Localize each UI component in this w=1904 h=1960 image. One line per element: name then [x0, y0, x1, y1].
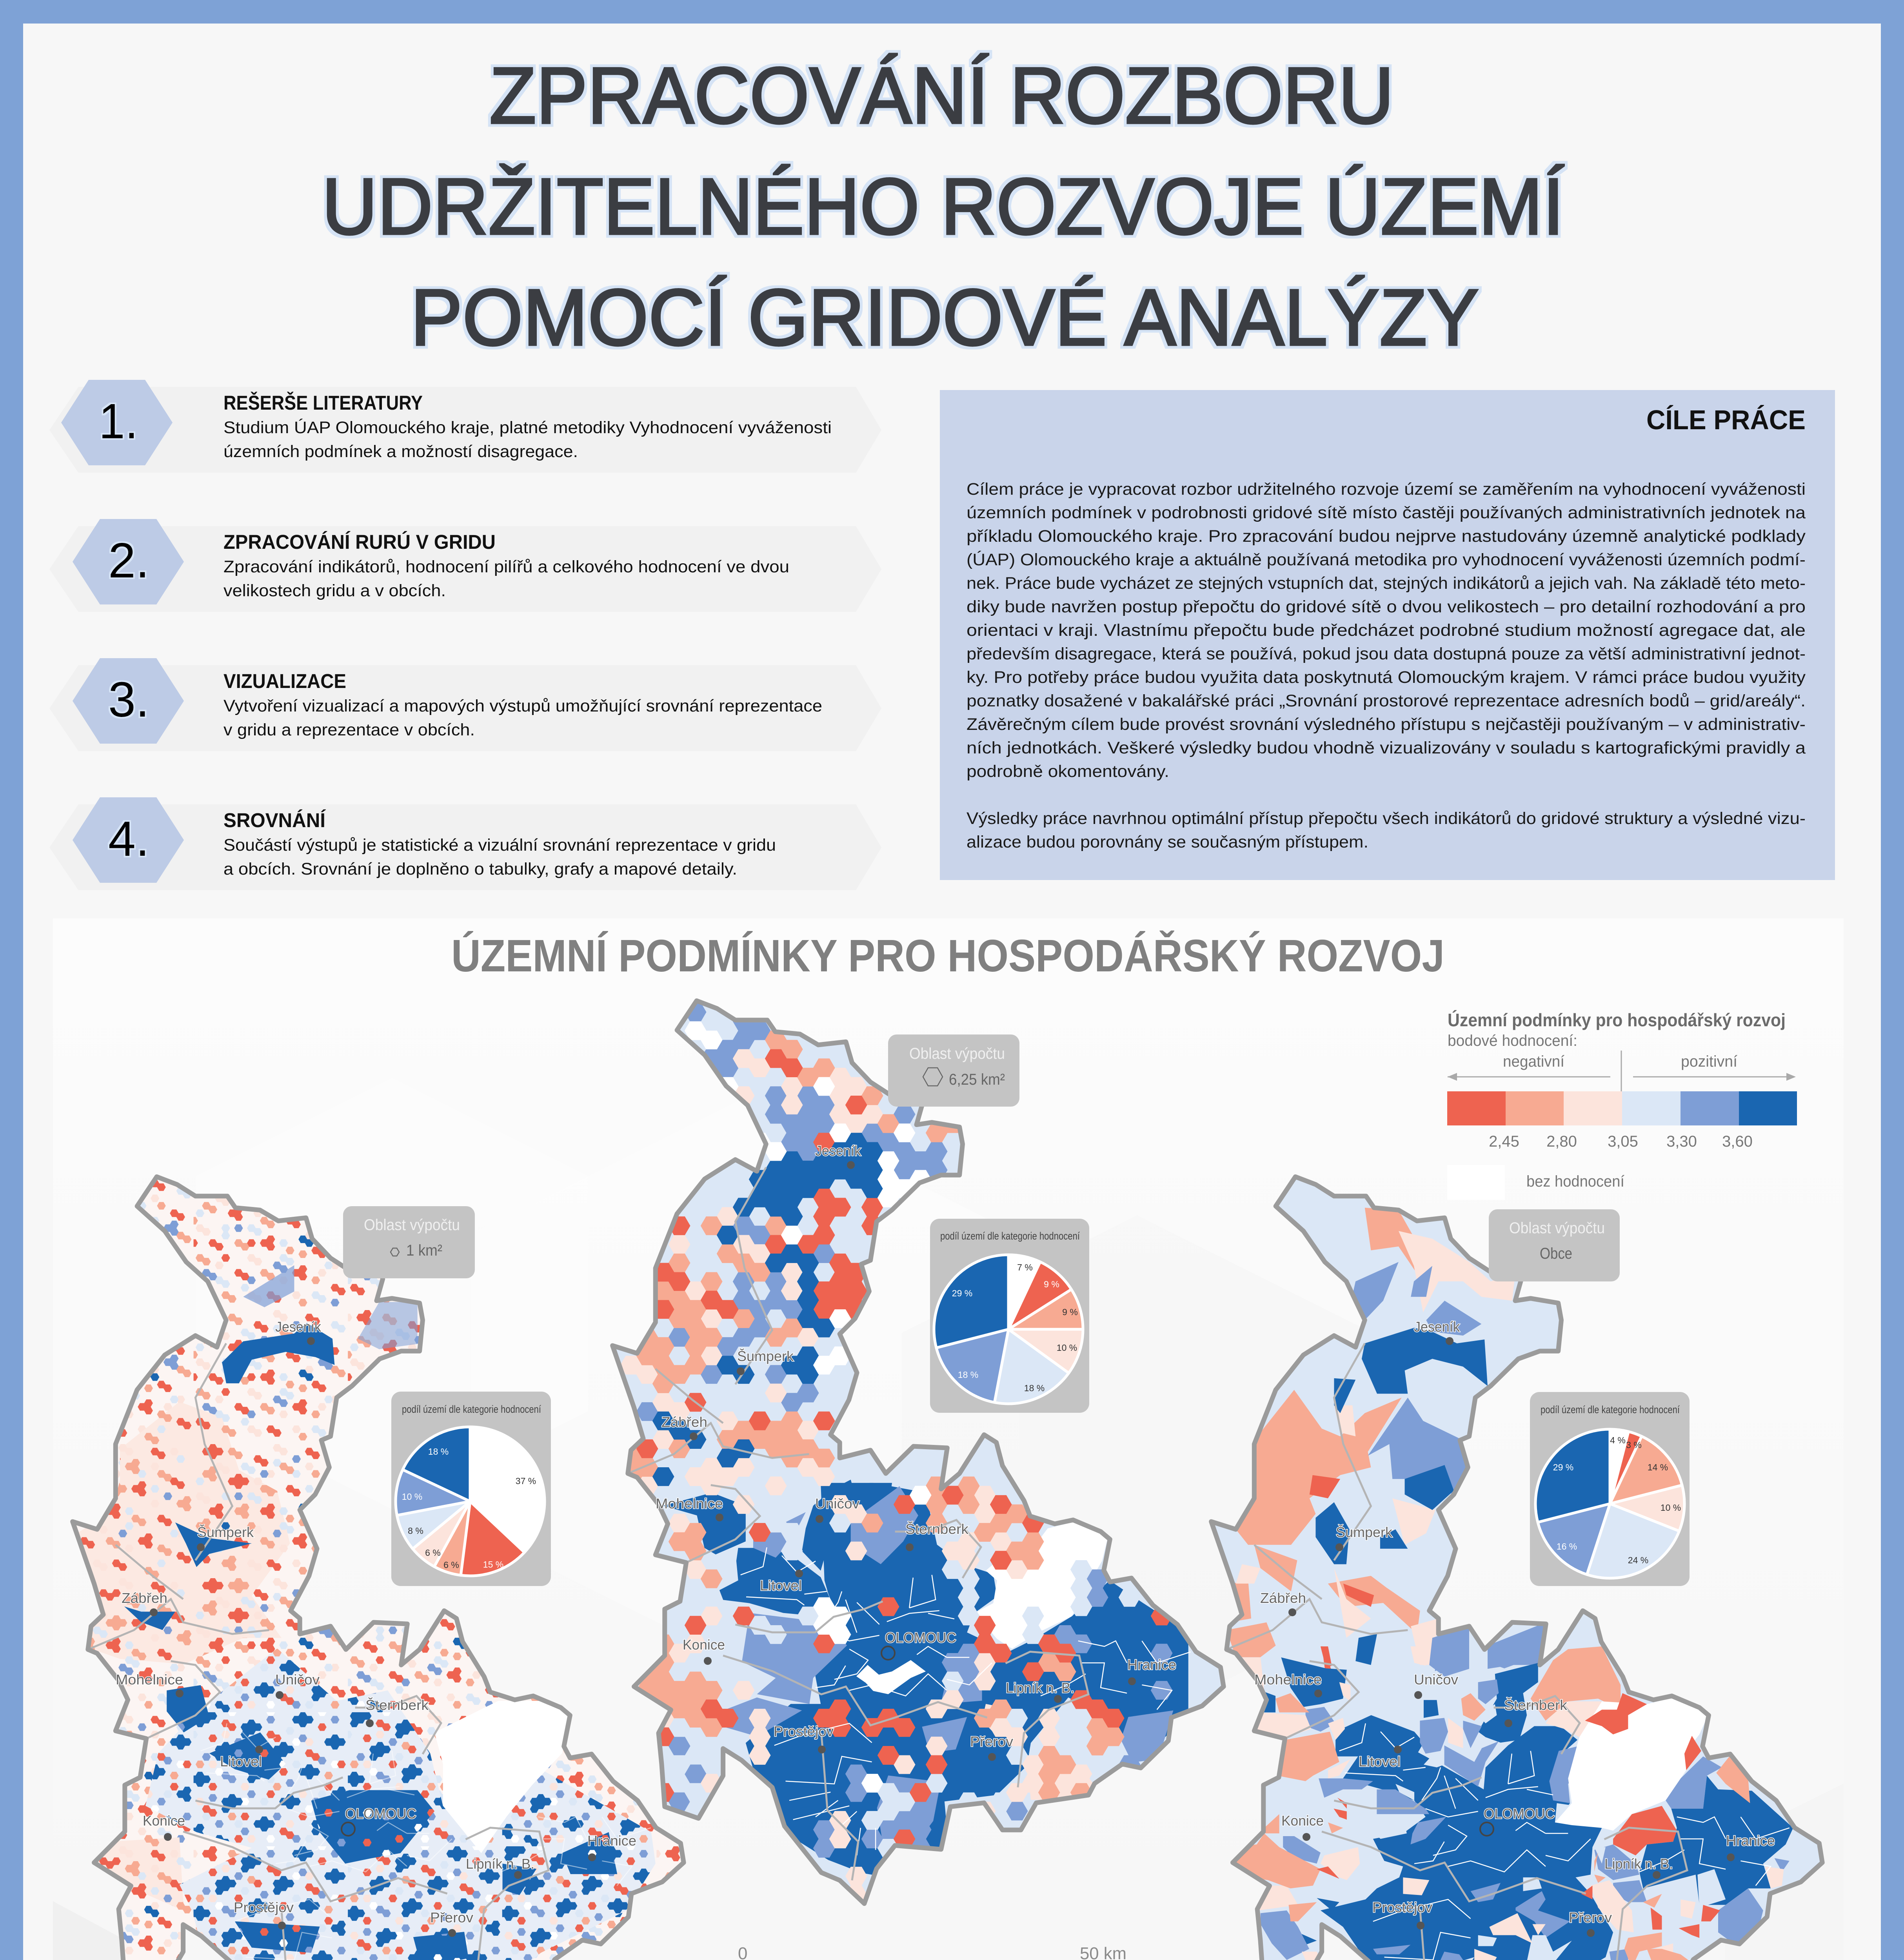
step 3: vizualizace: VIZUALIZACE — [223, 670, 346, 692]
city labels: middle map: Šumperk — [737, 1348, 794, 1364]
text: cíle práce body: podrobně okomentovány. — [967, 762, 1169, 781]
legend — [1447, 1010, 1797, 1200]
city labels: middle map: Uničov — [815, 1495, 859, 1512]
panel: map section background — [53, 918, 1844, 1960]
city labels: left map: Jeseník — [275, 1319, 322, 1335]
city labels: right map: Litovel — [1359, 1753, 1401, 1769]
step 4: srovnání: SROVNÁNÍ — [223, 809, 326, 831]
title — [322, 51, 1564, 362]
scale bar — [738, 1944, 1126, 1960]
map section heading: ÚZEMNÍ PODMÍNKY PRO HOSPODÁŘSKÝ ROZVOJ — [451, 930, 1444, 981]
text: cíle práce body: ních jednotkách. Veškeré výsledky budou vhodně vizualizovány v souladu s kartografickými pravidly a — [967, 739, 1806, 757]
city labels: right map: Šumperk — [1336, 1524, 1393, 1540]
text: cíle práce body — [967, 480, 1806, 851]
pie chart: municipalities: 14 % — [1648, 1462, 1668, 1472]
map: grid 1 km2 (left) — [70, 1174, 686, 1960]
step 1: rešerše literatury: Studium ÚAP Olomouckého kraje, platné metodiky Vyhodnocení vyváženosti — [223, 418, 832, 437]
step 2: zpracování RURÚ v gridu: velikostech gridu a v obcích. — [223, 581, 446, 600]
text: cíle práce body: orientaci v kraji. Vlastnímu přepočtu bude předcházet podrobné studium možností agregace dat, ale — [967, 621, 1806, 640]
pie chart: municipalities: 29 % — [1553, 1462, 1573, 1472]
text: cíle práce body: ky. Pro potřeby práce budou využita data poskytnutá Olomouckým krajem. V rámci práce budou využity — [967, 668, 1806, 687]
text: cíle práce body: nek. Práce bude vycházet ze stejných vstupních dat, stejných indikátorů a jejich vah. Na základě této meto- — [967, 574, 1806, 593]
callout: oblast výpočtu 1 km2: Oblast výpočtu — [364, 1216, 460, 1234]
step 2: zpracování RURÚ v gridu: ZPRACOVÁNÍ RURÚ V GRIDU — [223, 531, 496, 553]
map: municipalities (right) — [1187, 1157, 1862, 1960]
city labels: left map — [116, 1319, 636, 1937]
city labels: middle map — [656, 1143, 1176, 1761]
pie chart: 6,25 km2 grid: 18 % — [1024, 1383, 1045, 1393]
panel: cíle práce — [940, 390, 1835, 880]
step 3: vizualizace: Vytvoření vizualizací a mapových výstupů umožňující srovnání reprezentace — [223, 697, 822, 715]
city labels: middle map: Konice — [683, 1637, 725, 1653]
city labels: right map: Zábřeh — [1260, 1590, 1306, 1606]
heading: cíle práce: CÍLE PRÁCE — [1646, 405, 1806, 435]
city labels: right map: Jeseník — [1414, 1319, 1460, 1335]
legend: 3,30 — [1666, 1133, 1697, 1150]
pie chart: 6,25 km2 grid: 9 % — [1044, 1279, 1059, 1289]
city labels: right map: OLOMOUC — [1484, 1806, 1555, 1822]
callout: oblast výpočtu 1 km2: 1 km² — [406, 1242, 442, 1259]
city labels: left map: Hranice — [587, 1833, 636, 1849]
step 1: rešerše literatury: územních podmínek a možností disagregace. — [223, 442, 578, 461]
city labels: left map: Lipník n. B. — [466, 1856, 534, 1872]
step 1: rešerše literatury: 1. — [99, 394, 138, 449]
city labels: left map: Uničov — [275, 1671, 320, 1688]
pie chart: 1 km2 grid: 6 % — [425, 1548, 441, 1558]
city labels: middle map: Hranice — [1127, 1657, 1176, 1673]
city labels: left map: Šumperk — [197, 1524, 254, 1540]
city labels: left map: Přerov — [430, 1909, 473, 1926]
text: cíle práce body: diky bude navržen postup přepočtu do gridové sítě o dvou velikostech – pro detailní rozhodování a pro — [967, 597, 1806, 616]
pie chart: municipalities: 24 % — [1628, 1555, 1648, 1565]
map: grid 6,25 km2 (middle) — [610, 998, 1226, 1906]
city labels: middle map: OLOMOUC — [885, 1630, 956, 1646]
city labels: right map: Šternberk — [1504, 1697, 1568, 1713]
city labels: left map: Litovel — [220, 1753, 262, 1769]
step 3: vizualizace: 3. — [108, 672, 149, 727]
text: cíle práce body: poznatky dosažené v bakalářské práci „Srovnání prostorové reprezentace adresních bodů – grid/areály“. — [967, 691, 1806, 710]
callout: oblast výpočtu 6,25 km2 — [888, 1034, 1019, 1107]
city labels: left map: Konice — [143, 1813, 185, 1829]
legend: negativní — [1503, 1053, 1564, 1070]
city labels: left map: Prostějov — [234, 1899, 294, 1915]
pie chart: 1 km2 grid: 18 % — [428, 1446, 449, 1457]
city labels: right map: Konice — [1281, 1813, 1324, 1829]
callout: oblast výpočtu obce — [1489, 1209, 1620, 1281]
callout: oblast výpočtu 6,25 km2: 6,25 km² — [949, 1071, 1005, 1088]
pie chart: 1 km2 grid: podíl území dle kategorie hodnocení — [402, 1403, 541, 1415]
step 3: vizualizace: v gridu a reprezentace v obcích. — [223, 720, 475, 739]
city labels: right map: Lipník n. B. — [1604, 1856, 1673, 1872]
step 4: srovnání: a obcích. Srovnání je doplněno o tabulky, grafy a mapové detaily. — [223, 860, 737, 878]
text: cíle práce body: příkladu Olomouckého kraje. Pro zpracování budou nejprve nastudovány územně analytické podklady — [967, 527, 1806, 546]
city labels: middle map: Přerov — [970, 1733, 1013, 1749]
city labels: middle map: Lipník n. B. — [1006, 1680, 1074, 1696]
city labels: left map: Šternberk — [365, 1697, 429, 1713]
pie chart: municipalities — [1530, 1392, 1690, 1586]
step 4: srovnání: Součástí výstupů je statistické a vizuální srovnání reprezentace v gridu — [223, 836, 776, 855]
callout: oblast výpočtu obce: Obce — [1540, 1245, 1572, 1262]
pie chart: municipalities: 16 % — [1557, 1541, 1577, 1552]
text: cíle práce body: Výsledky práce navrhnou optimální přístup přepočtu všech indikátorů do gridové struktury a výsledné vizu- — [967, 809, 1806, 828]
pie chart: municipalities: 10 % — [1661, 1503, 1681, 1513]
city labels: middle map: Jeseník — [815, 1143, 861, 1159]
legend: 3,05 — [1608, 1133, 1638, 1150]
pie chart: municipalities: 3 % — [1626, 1440, 1642, 1450]
title: ZPRACOVÁNÍ ROZBORU — [489, 51, 1394, 140]
city labels: right map: Mohelnice — [1254, 1671, 1322, 1688]
city labels: left map: Mohelnice — [116, 1671, 183, 1688]
pie chart: 6,25 km2 grid: 29 % — [952, 1288, 972, 1298]
step 4: srovnání: 4. — [108, 811, 149, 866]
pie chart: 1 km2 grid: 6 % — [443, 1560, 459, 1570]
step 2: zpracování RURÚ v gridu: 2. — [108, 533, 149, 588]
callout: oblast výpočtu obce: Oblast výpočtu — [1509, 1220, 1605, 1237]
city labels: middle map: Litovel — [760, 1577, 802, 1593]
city labels: middle map: Mohelnice — [656, 1495, 723, 1512]
legend: pozitivní — [1681, 1053, 1737, 1070]
city labels: right map — [1254, 1319, 1775, 1937]
city labels: middle map: Prostějov — [774, 1723, 834, 1739]
pie chart: 6,25 km2 grid: 7 % — [1017, 1262, 1033, 1272]
pie chart: 6,25 km2 grid: 10 % — [1057, 1343, 1077, 1353]
legend: 3,60 — [1722, 1133, 1753, 1150]
step 4: srovnání — [49, 797, 881, 890]
city labels: right map: Prostějov — [1372, 1899, 1432, 1915]
step 2: zpracování RURÚ v gridu — [49, 519, 881, 612]
text: cíle práce body: územních podmínek v podrobnosti gridové sítě místo častěji používaných administrativních jednotek na — [967, 503, 1806, 522]
pie chart: 1 km2 grid — [391, 1392, 551, 1586]
text: cíle práce body: především disagregace, která se používá, pokud jsou data dostupná pouze za větší administrativní jednot- — [967, 644, 1806, 663]
pie chart: 6,25 km2 grid: podíl území dle kategorie hodnocení — [940, 1230, 1080, 1242]
pie chart: municipalities: podíl území dle kategorie hodnocení — [1541, 1404, 1680, 1416]
callout: oblast výpočtu 1 km2 — [343, 1206, 475, 1278]
pie chart: 1 km2 grid: 10 % — [402, 1492, 422, 1502]
pie chart: municipalities: 4 % — [1610, 1435, 1626, 1445]
callout: oblast výpočtu 6,25 km2: Oblast výpočtu — [909, 1045, 1005, 1062]
title: POMOCÍ GRIDOVÉ ANALÝZY — [411, 273, 1479, 362]
pie chart: 1 km2 grid: 8 % — [408, 1526, 423, 1536]
pie chart: 6,25 km2 grid: 9 % — [1062, 1307, 1078, 1317]
legend: Územní podmínky pro hospodářský rozvoj — [1448, 1010, 1786, 1030]
step 1: rešerše literatury — [49, 380, 881, 473]
text: cíle práce body: Závěrečným cílem bude provést srovnání výsledného přístupu s nejčastěji používaným – v administrativ- — [967, 715, 1806, 734]
text: cíle práce body: alizace budou porovnány se současným přístupem. — [967, 833, 1368, 851]
step 3: vizualizace — [49, 658, 881, 751]
city labels: left map: Zábřeh — [122, 1590, 167, 1606]
city labels: middle map: Šternberk — [905, 1521, 969, 1537]
text: cíle práce body: (ÚAP) Olomouckého kraje a aktuálně používaná metodika pro vyhodnocení vyváženosti územních podmí- — [967, 550, 1806, 569]
city labels: middle map: Zábřeh — [661, 1414, 707, 1430]
legend: 2,80 — [1546, 1133, 1577, 1150]
legend: bez hodnocení — [1526, 1173, 1624, 1190]
city labels: right map: Hranice — [1726, 1833, 1775, 1849]
legend: 2,45 — [1489, 1133, 1519, 1150]
city labels: right map: Přerov — [1569, 1909, 1612, 1926]
step 2: zpracování RURÚ v gridu: Zpracování indikátorů, hodnocení pilířů a celkového hodnocení ve dvou — [223, 557, 789, 576]
pie chart: 6,25 km2 grid: 18 % — [958, 1370, 978, 1380]
title: UDRŽITELNÉHO ROZVOJE ÚZEMÍ — [322, 162, 1564, 251]
text: cíle práce body: Cílem práce je vypracovat rozbor udržitelného rozvoje území se zaměřením na vyhodnocení vyváženosti — [967, 480, 1806, 499]
city labels: right map: Uničov — [1414, 1671, 1458, 1688]
legend: bodové hodnocení: — [1448, 1032, 1577, 1049]
city labels: left map: OLOMOUC — [345, 1806, 416, 1822]
pie chart: 6,25 km2 grid — [930, 1219, 1089, 1413]
pie chart: 1 km2 grid: 37 % — [516, 1476, 536, 1486]
pie chart: 1 km2 grid: 15 % — [483, 1559, 503, 1570]
step 1: rešerše literatury: REŠERŠE LITERATURY — [223, 391, 423, 414]
